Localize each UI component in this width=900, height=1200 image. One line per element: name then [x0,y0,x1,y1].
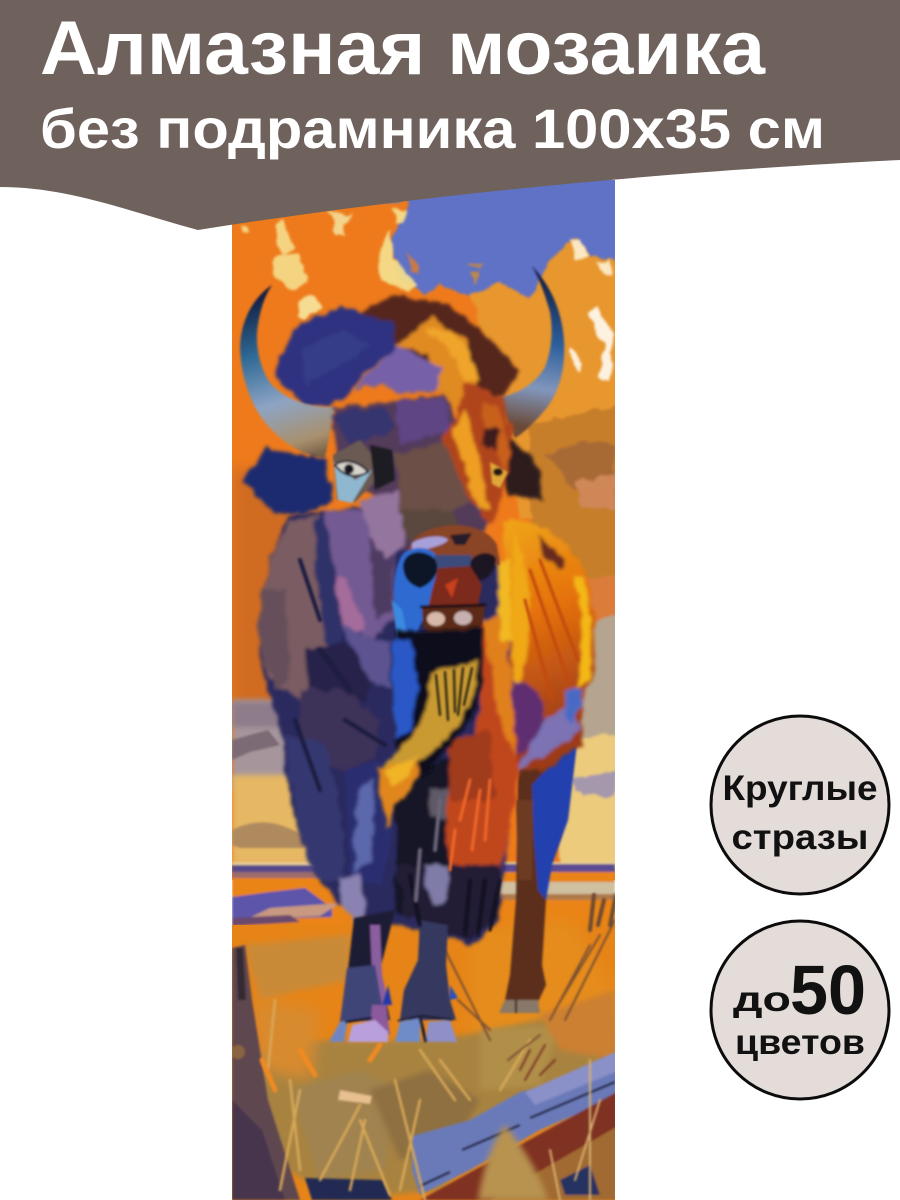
grass strokes [262,895,616,1200]
central black chest [395,760,462,915]
left ear [243,448,333,514]
painting: bison at sunset [231,180,620,1200]
mane [275,296,520,415]
pink and purple neck [325,510,395,640]
badge: round rhinestones: Круглые [722,769,878,808]
title: Алмазная мозаика [40,6,766,91]
header banner [0,0,900,230]
head and face [330,382,542,560]
badge: up to 50 colours: 50 [790,951,866,1029]
fur mass [258,500,514,945]
fur strokes [295,560,578,935]
forehead [332,395,490,550]
bison body [258,500,595,945]
horns [240,266,564,458]
horizon and distant mesas [232,862,615,932]
subtitle: без подрамника 100х35 см [40,97,825,160]
flank [503,520,595,770]
badge: up to 50 colours: цветов [735,1023,865,1062]
badge: up to 50 colours: до [733,980,791,1019]
dark right fur [505,440,542,500]
sky background [232,180,615,880]
tan left shoulder [260,512,330,701]
fur skirt [395,865,500,940]
badge: round rhinestones: стразы [732,818,868,857]
cloud highlights [240,208,612,382]
log and post [231,945,620,1200]
orange chest fur [445,620,518,880]
badge: round rhinestones [711,716,889,894]
badge: up to 50 colours [711,921,889,1099]
far hind leg [499,735,578,1013]
muzzle [391,524,502,640]
beard [376,628,484,828]
front legs and hooves [329,910,458,1042]
fiery mane strip [442,382,514,525]
left eye [333,440,395,503]
right eye [490,462,508,488]
field [232,920,620,1200]
orange and gold clouds [360,200,615,871]
dark mid fur [305,640,372,700]
